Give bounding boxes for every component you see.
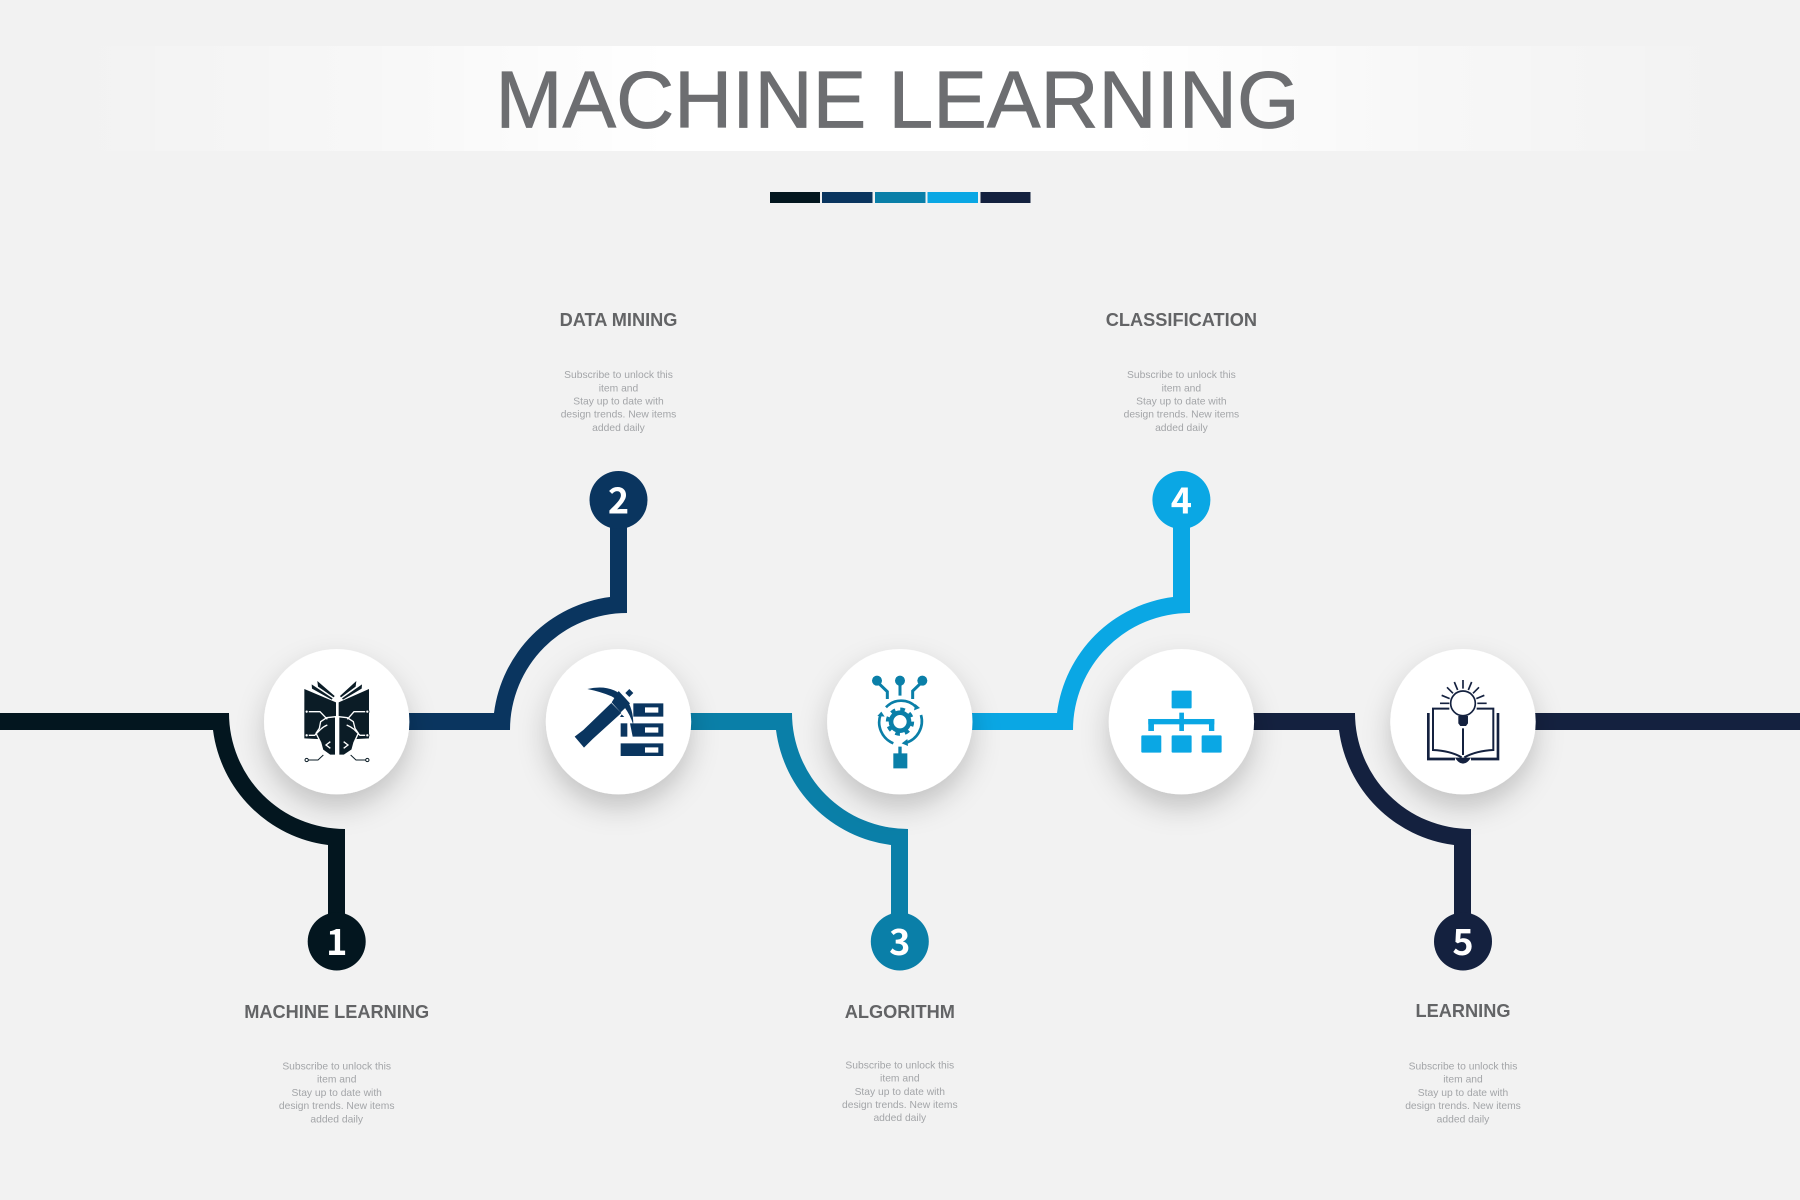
text block 2: item and: [599, 383, 639, 394]
heading 3: ALGORITHM: [845, 1002, 955, 1022]
title band: [70, 46, 1730, 151]
right line end: [1530, 713, 1800, 730]
text block 4: [1124, 370, 1239, 434]
text block 5: design trends. New items: [1405, 1101, 1521, 1112]
text block 1: Stay up to date with: [291, 1088, 382, 1099]
heading 2: DATA MINING: [560, 310, 677, 330]
text block 2: Stay up to date with: [573, 397, 664, 408]
badge 5: [1434, 912, 1492, 970]
heading 5: LEARNING: [1416, 1001, 1510, 1021]
title: MACHINE LEARNING: [495, 56, 1300, 146]
text block 4: Subscribe to unlock this: [1127, 370, 1236, 381]
text block 1: Subscribe to unlock this: [282, 1062, 391, 1072]
icon: algorithm gear: [872, 676, 927, 768]
text block 5: [1405, 1062, 1521, 1125]
text block 2: design trends. New items: [561, 410, 676, 421]
icon: book with brain: [304, 681, 369, 762]
text block 5: added daily: [1437, 1114, 1490, 1125]
badge 2: [590, 471, 648, 529]
text block 3: design trends. New items: [842, 1100, 958, 1111]
badge 1: [308, 912, 366, 970]
text block 4: design trends. New items: [1124, 410, 1239, 421]
text block 2: Subscribe to unlock this: [564, 370, 673, 381]
badge 4: [1152, 471, 1210, 529]
badge 2: 2: [608, 472, 629, 524]
connector 2: [409, 500, 627, 730]
circle 2: [546, 649, 691, 794]
text block 3: [842, 1060, 958, 1124]
connector 4: [972, 500, 1190, 730]
heading 4: CLASSIFICATION: [1106, 310, 1257, 330]
icon: classification hierarchy: [1141, 691, 1222, 753]
text block 4: Stay up to date with: [1136, 397, 1227, 408]
connector 1: [0, 713, 345, 920]
badge 3: 3: [889, 914, 910, 966]
connector 3: [690, 713, 908, 920]
circle 5: [1390, 649, 1536, 794]
circle 3: [827, 649, 972, 794]
text block 2: added daily: [592, 423, 646, 434]
text block 1: added daily: [310, 1114, 364, 1125]
badge 5: 5: [1452, 914, 1474, 966]
text block 5: Subscribe to unlock this: [1409, 1062, 1517, 1072]
badge 3: [871, 912, 929, 970]
text block 3: Subscribe to unlock this: [845, 1060, 954, 1071]
text block 4: added daily: [1155, 423, 1209, 434]
text block 2: [561, 370, 676, 434]
colour swatches: [770, 192, 1030, 203]
badge 4: 4: [1171, 472, 1192, 524]
text block 5: item and: [1443, 1075, 1483, 1086]
text block 3: Stay up to date with: [855, 1087, 945, 1098]
heading 1: MACHINE LEARNING: [244, 1002, 429, 1022]
text block 5: Stay up to date with: [1418, 1088, 1508, 1099]
circle 1: [264, 649, 409, 794]
text block 1: item and: [317, 1075, 357, 1086]
text block 1: design trends. New items: [279, 1101, 395, 1112]
badge 1: 1: [326, 914, 347, 966]
icon: pickaxe and data servers: [575, 687, 663, 756]
text block 4: item and: [1162, 383, 1201, 394]
text block 1: [279, 1062, 395, 1125]
circle 4: [1109, 649, 1254, 794]
text block 3: added daily: [873, 1113, 927, 1124]
icon: book and light bulb: [1428, 680, 1498, 764]
connector 5: [1253, 713, 1471, 920]
text block 3: item and: [880, 1074, 920, 1084]
